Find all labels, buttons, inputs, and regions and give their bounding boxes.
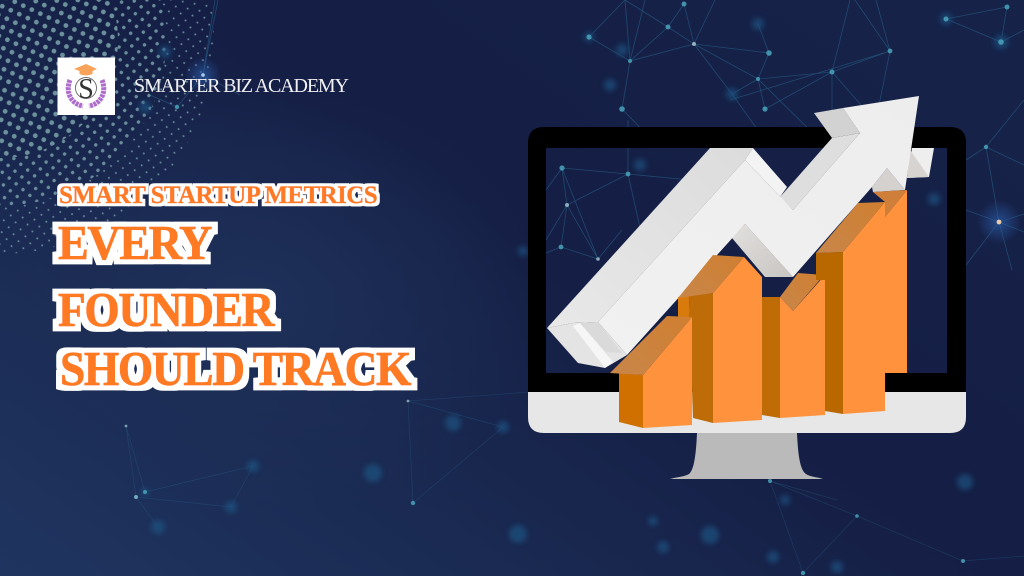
logo badge <box>58 58 115 115</box>
monitor <box>528 127 966 479</box>
icon: graduation cap <box>74 64 97 76</box>
logo laurel wreath <box>68 80 104 106</box>
subtitle: SMART STARTUP METRICS <box>59 180 377 209</box>
headline: EVERY <box>58 215 212 270</box>
bar 2 <box>678 255 762 423</box>
monitor stand <box>670 433 823 479</box>
growth arrow <box>547 96 934 368</box>
monitor chin <box>528 392 966 433</box>
bar chart <box>610 190 907 428</box>
headline: SHOULD TRACK <box>60 341 411 396</box>
headline: FOUNDER <box>58 282 275 337</box>
brand name: SMARTER BIZ ACADEMY <box>134 75 349 97</box>
bar 3 <box>762 273 825 418</box>
headline <box>58 215 411 396</box>
bar 4 <box>816 202 885 414</box>
halftone dot pattern <box>0 0 190 230</box>
logo monogram: S <box>78 74 94 105</box>
bar 1 <box>610 316 692 428</box>
bar 5 <box>873 190 907 373</box>
monitor bezel <box>528 127 966 392</box>
